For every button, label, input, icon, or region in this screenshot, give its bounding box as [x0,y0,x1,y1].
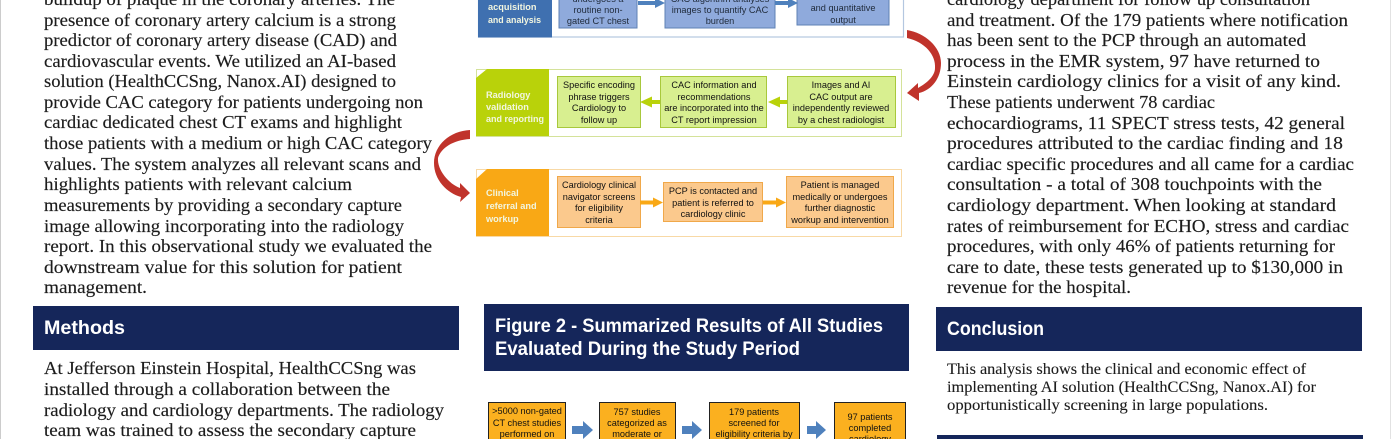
panel: radiology validation and reporting: by a chest radiologist [798,115,885,125]
panel: acquisition and analysis: and quantitative [811,3,875,13]
text block: introduction: cardiovascular events. We utilized an AI-based [44,51,396,71]
text block: introduction: those patients with a medium or high CAC category [44,133,432,153]
heading: Methods [33,306,459,350]
panel: radiology validation and reporting: follow up [581,115,617,125]
panel: radiology validation and reporting [476,69,902,136]
flowchart: study results: moderate or [612,429,662,439]
text block: methods: installed through a collaboration between the [44,379,390,399]
panel: acquisition and analysis: images to quantify CAC [672,5,769,15]
label: acquisition and analysis: acquisition [488,2,537,12]
flowchart: study results [488,402,906,439]
panel: clinical referral and workup: cardiology clinic [681,209,746,219]
panel: acquisition and analysis: routine non- [573,5,623,15]
panel: clinical referral and workup: Clinical [486,188,519,198]
text block: introduction: image allowing incorporating into the radiology [44,216,404,236]
heading: Conclusion [936,307,1362,351]
panel: clinical referral and workup: Cardiology clinical [562,180,636,190]
flowchart: study results: screened for [728,418,780,428]
flowchart: study results: completed [849,423,891,433]
text block: introduction [44,0,432,297]
flowchart: study results: categorized as [607,418,667,428]
text block: conclusion: implementing AI solution (HealthCCSng, Nanox.AI) for [947,379,1317,396]
text block: results: care to date, these tests generated up to $130,000 in [947,257,1343,277]
panel: radiology validation and reporting: recommendations [677,92,751,102]
arrow: curved red to clinical referral [434,130,470,202]
panel: clinical referral and workup: patient is referred to [672,198,754,208]
text block: results: and treatment. Of the 179 patients where notification [947,10,1348,30]
panel: acquisition and analysis: gated CT chest [567,16,630,26]
panel: acquisition and analysis [478,0,904,38]
label: acquisition and analysis: and analysis [488,15,541,25]
arrow: curved red to radiology [907,30,941,101]
text block: results: cardiology department. When looking at standard [947,195,1336,215]
panel: clinical referral and workup: Patient is managed [801,180,879,190]
panel: clinical referral and workup: navigator screens [563,192,636,202]
text block: methods: radiology and cardiology departments. The radiology [44,400,444,420]
text block: introduction: predictor of coronary artery disease (CAD) and [44,30,397,50]
text block: conclusion [947,361,1317,414]
text block: methods: At Jefferson Einstein Hospital, HealthCCSng was [44,358,416,378]
text block: results: procedures, with only 46% of patients returning for [947,236,1335,256]
text block: introduction: presence of coronary artery calcium is a strong [44,10,396,30]
text block: introduction: downstream value for this solution for patient [44,257,402,277]
text block: results: cardiac specific procedures and all came for a cardiac [947,154,1354,174]
text block: results: process in the EMR system, 97 have returned to [947,51,1320,71]
panel: clinical referral and workup: referral and [486,201,537,211]
heading: Figure 2: Evaluated During the Study Period [495,338,800,360]
heading: Figure 2 [484,304,909,371]
panel: clinical referral and workup [476,169,902,236]
panel: radiology validation and reporting: phrase triggers [568,92,630,102]
panel: radiology validation and reporting: and reporting [486,114,544,124]
text block: results: has been sent to the PCP through an automated [947,30,1306,50]
panel: clinical referral and workup: PCP is contacted and [669,186,757,196]
panel: radiology validation and reporting: are incorporated into the [664,103,764,113]
flowchart: study results: 97 patients [848,412,893,422]
text block: conclusion: opportunistically screening in large populations. [947,397,1268,414]
panel: clinical referral and workup: criteria [585,215,614,225]
flowchart: study results: 757 studies [614,407,661,417]
panel: clinical referral and workup: workup and intervention [790,215,889,225]
panel: radiology validation and reporting: Specific encoding [563,80,635,90]
text block: results: Einstein cardiology clinics for a visit of any kind. [947,71,1341,91]
text block: introduction: report. In this observational study we evaluated the [44,236,432,256]
text block: results: These patients underwent 78 cardiac [947,92,1215,112]
flowchart: study results: 179 patients [729,407,779,417]
panel: radiology validation and reporting: validation [486,102,529,112]
panel: radiology validation and reporting: Cardiology to [572,103,626,113]
label: acquisition and analysis [488,2,541,25]
text block: introduction: cardiac dedicated chest CT exams and highlight [44,112,402,132]
flowchart: study results: >5000 non-gated [492,406,562,416]
panel: clinical referral and workup: medically or undergoes [792,192,888,202]
text block: results: procedures attributed to the cardiac finding and 18 [947,133,1343,153]
text block: results: consultation - a total of 308 touchpoints with the [947,174,1322,194]
panel: radiology validation and reporting: CAC information and [671,80,757,90]
text block: methods [44,358,444,439]
panel: clinical referral and workup: workup [485,214,519,224]
text block: introduction: solution (HealthCCSng, Nanox.AI) designed to [44,71,396,91]
panel: radiology validation and reporting: CT report impression [671,115,757,125]
panel: acquisition and analysis: burden [706,16,734,26]
panel: radiology validation and reporting: CAC output are [809,92,873,102]
text block: results: revenue for the hospital. [947,277,1131,297]
text block: introduction: values. The system analyzes all relevant scans and [44,154,421,174]
text block: conclusion: This analysis shows the clinical and economic effect of [947,361,1307,378]
panel: radiology validation and reporting: Images and AI [812,80,870,90]
flowchart: study results: performed on [500,429,554,439]
panel: clinical referral and workup: further diagnostic [805,203,876,213]
heading: Figure 2: Figure 2 - Summarized Results of All Studies [495,315,883,337]
text block: results: rates of reimbursement for ECHO, stress and cardiac [947,216,1349,236]
heading: Methods: Methods [44,317,125,339]
text block: results: echocardiograms, 11 SPECT stress tests, 42 general [947,113,1345,133]
flowchart: study results: CT chest studies [493,418,562,428]
panel: clinical referral and workup: for eligibility [575,203,623,213]
heading: Conclusion: Conclusion [947,318,1044,340]
text block: introduction: highlights patients with relevant calcium [44,174,352,194]
text block: introduction: provide CAC category for patients undergoing non [44,92,423,112]
flowchart: study results: eligibility criteria by [715,429,793,439]
text block: introduction: management. [44,277,147,297]
text block: results [947,0,1354,297]
panel: acquisition and analysis: output [830,15,856,25]
panel: radiology validation and reporting: Radiology [486,90,531,100]
panel: radiology validation and reporting: independently reviewed [793,103,889,113]
text block: introduction: measurements by providing a secondary capture [44,195,402,215]
heading bar: next section [937,435,1363,439]
